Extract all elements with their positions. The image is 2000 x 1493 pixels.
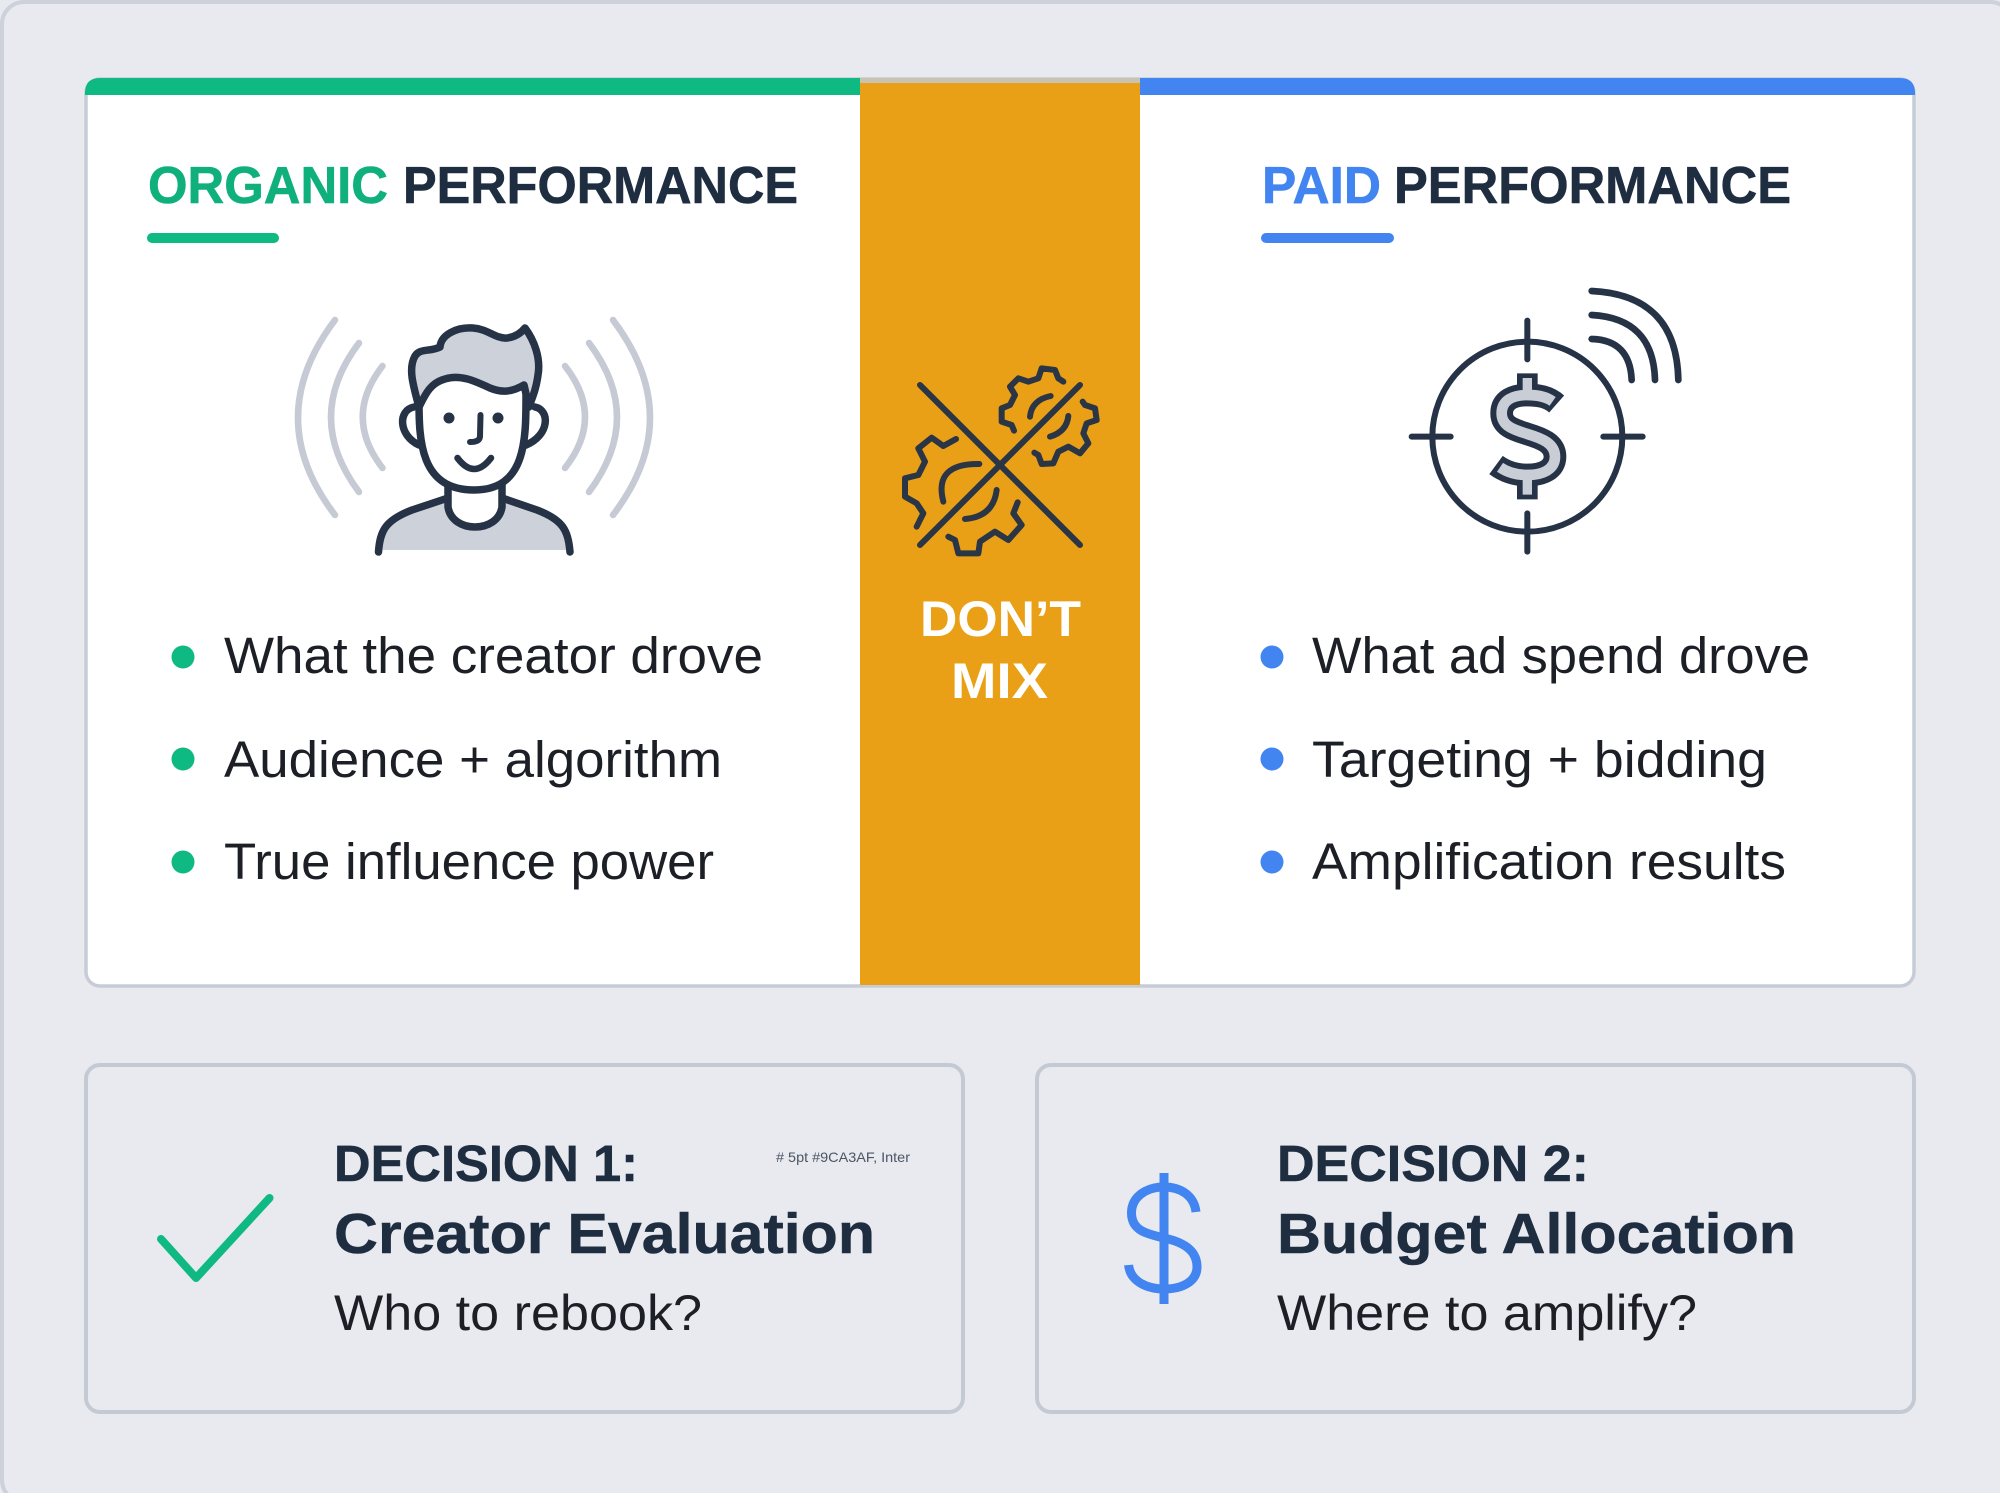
- accent bar: paid: [1140, 78, 1915, 95]
- icon: creator with signal waves: [298, 320, 650, 552]
- list: organic bullets: [172, 627, 763, 890]
- ears: [403, 407, 419, 445]
- panel: decision 1: [86, 1065, 963, 1412]
- heading: paid performance: PERFORMANCE: [1394, 157, 1791, 215]
- bullet 3: Amplification results: [1312, 833, 1786, 890]
- accent bar: organic: [85, 78, 860, 95]
- face: [419, 385, 526, 490]
- annotation: # 5pt #9CA3AF, Inter: [776, 1149, 910, 1165]
- heading underline: organic: [147, 233, 279, 243]
- neck: [448, 485, 502, 527]
- panel background: [86, 79, 1914, 986]
- shoulders: [378, 498, 570, 550]
- bullet 1: What the creator drove: [224, 627, 763, 684]
- signal waves: [298, 320, 650, 515]
- bullet 1: What ad spend drove: [1312, 627, 1810, 684]
- card outline: [1037, 1065, 1914, 1412]
- decision label: DECISION 2:: [1277, 1135, 1589, 1192]
- decision title: Creator Evaluation: [334, 1202, 875, 1266]
- hair: [412, 328, 539, 407]
- decision title: Budget Allocation: [1277, 1202, 1796, 1266]
- icon: crossed-out gears: [905, 368, 1097, 553]
- eyes: [444, 412, 454, 424]
- icon: check mark: [161, 1198, 270, 1278]
- heading: paid performance: PAID: [1262, 157, 1381, 215]
- heading: organic performance: [148, 157, 798, 215]
- label: don't mix: [920, 591, 1081, 709]
- card outline: [86, 1065, 963, 1412]
- heading: organic performance: ORGANIC: [148, 157, 388, 215]
- list: paid bullets: [1260, 627, 1810, 890]
- nose and smile: [470, 415, 480, 442]
- heading underline: paid: [1261, 233, 1394, 243]
- panel: decision 2: [1037, 1065, 1914, 1412]
- dollar symbol: [1496, 373, 1557, 499]
- bullet 2: Targeting + bidding: [1312, 731, 1767, 788]
- icon: dollar sign: [1129, 1173, 1197, 1304]
- heading: organic performance: PERFORMANCE: [403, 157, 798, 215]
- bullet 2: Audience + algorithm: [224, 731, 722, 788]
- bullet 3: True influence power: [224, 833, 714, 890]
- icon: dollar target with signal: [1412, 291, 1678, 552]
- center band: don't mix: [860, 78, 1140, 985]
- panel: main comparison: [85, 78, 1915, 986]
- decision question: Who to rebook?: [334, 1285, 702, 1341]
- decision label: DECISION 1:: [334, 1135, 638, 1192]
- label: don't mix: MIX: [951, 653, 1048, 709]
- decision question: Where to amplify?: [1277, 1285, 1697, 1341]
- label: don't mix: DON’T: [920, 591, 1081, 647]
